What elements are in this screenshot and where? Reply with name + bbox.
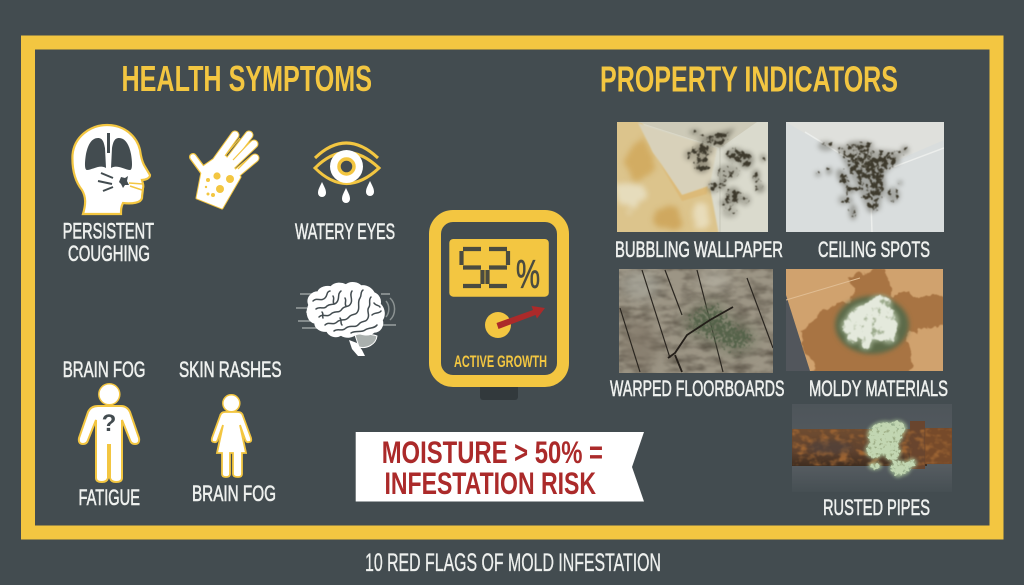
icon: head with lungs and cough bbox=[72, 125, 150, 214]
label: moldy materials: MOLDY MATERIALS bbox=[809, 376, 948, 401]
panel: moisture meter bbox=[435, 216, 563, 400]
callout banner: moisture risk: MOISTURE > 50% = bbox=[382, 434, 603, 470]
icon: woman figure bbox=[212, 395, 251, 477]
panel: health symptoms bbox=[63, 58, 396, 510]
icon: person with question mark: ? bbox=[102, 410, 116, 437]
label: persistent coughing bbox=[63, 218, 154, 266]
label: skin rashes: SKIN RASHES bbox=[179, 357, 282, 382]
photo: warped floorboards bbox=[619, 269, 773, 373]
photo: bubbling wallpaper bbox=[617, 122, 768, 232]
yellow frame bbox=[28, 42, 996, 532]
panel: property indicators bbox=[600, 58, 952, 520]
photo: ceiling spots bbox=[786, 122, 944, 232]
label: warped floorboards: WARPED FLOORBOARDS bbox=[610, 376, 784, 401]
label: watery eyes: WATERY EYES bbox=[295, 219, 395, 244]
icon: person with question mark bbox=[79, 384, 139, 482]
label: ceiling spots: CEILING SPOTS bbox=[818, 237, 930, 262]
heading: property indicators: PROPERTY INDICATORS bbox=[600, 58, 898, 100]
label: fatigue: FATIGUE bbox=[78, 485, 140, 510]
meter dial and needle bbox=[485, 306, 545, 338]
meter body bbox=[435, 216, 563, 381]
heading: health symptoms: HEALTH SYMPTOMS bbox=[122, 58, 372, 99]
label: rusted pipes: RUSTED PIPES bbox=[823, 495, 930, 520]
icon: hand with rash bbox=[193, 135, 255, 208]
icon: brain bbox=[296, 283, 396, 356]
icon: watery eye bbox=[315, 143, 379, 203]
label: bubbling wallpaper: BUBBLING WALLPAPER bbox=[615, 237, 783, 262]
photo: moldy materials bbox=[786, 269, 950, 375]
footer title: 10 RED FLAGS OF MOLD INFESTATION bbox=[365, 549, 661, 577]
callout banner: moisture risk bbox=[356, 432, 644, 502]
label: active growth: ACTIVE GROWTH bbox=[454, 352, 547, 371]
meter stand bbox=[480, 384, 518, 400]
label: persistent coughing: PERSISTENT bbox=[63, 218, 154, 244]
meter display bbox=[449, 239, 549, 297]
label: persistent coughing: COUGHING bbox=[68, 241, 150, 266]
label: brain fog right: BRAIN FOG bbox=[192, 481, 276, 506]
label: brain fog left: BRAIN FOG bbox=[63, 357, 146, 382]
photo: rusted pipes bbox=[792, 404, 952, 492]
callout banner: moisture risk: INFESTATION RISK bbox=[384, 465, 596, 501]
meter display: % bbox=[516, 253, 540, 297]
